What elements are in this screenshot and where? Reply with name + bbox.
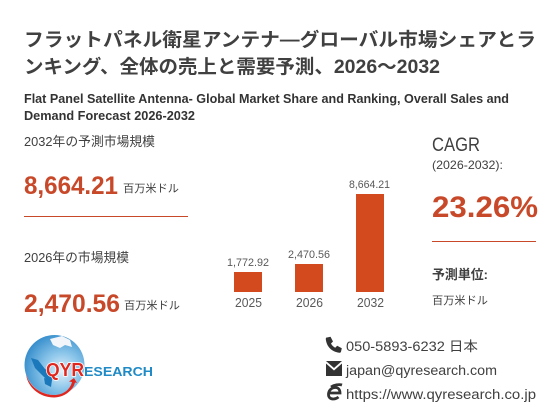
bar: 2026: 2026 <box>296 296 323 310</box>
icon: envelope <box>326 361 342 376</box>
title: Japanese: ンキング、全体の売上と需要予測、2026～2032 <box>24 55 440 78</box>
wordmark: QYR <box>46 360 84 380</box>
bar chart <box>227 179 390 310</box>
bar: 2026: 2,470.56 <box>288 249 330 261</box>
panel: 2032 market size: 百万米ドル <box>123 182 179 195</box>
contact: website: https://www.qyresearch.co.jp <box>346 387 536 402</box>
panel: CAGR: 23.26% <box>432 191 538 224</box>
panel: 2026 market size: 2026年の市場規模 <box>24 250 129 265</box>
panel: forecast unit: 百万米ドル <box>432 294 488 307</box>
logo: QYResearch <box>24 335 153 398</box>
wordmark: ESEARCH <box>84 364 153 379</box>
subtitle: English: Demand Forecast 2026-2032 <box>24 109 195 123</box>
subtitle: English: Flat Panel Satellite Antenna- Global Market Share and Ranking, Overall Sales and <box>24 92 509 106</box>
icon: phone <box>326 337 342 353</box>
panel: forecast unit: 予測単位: <box>432 267 488 282</box>
panel: 2026 market size <box>24 250 180 318</box>
subtitle: English <box>24 92 509 123</box>
panel: 2032 market size: 2032年の予測市場規模 <box>24 134 155 149</box>
panel: 2026 market size: 百万米ドル <box>124 299 180 312</box>
wordmark <box>46 360 153 380</box>
contact: email: japan@qyresearch.com <box>345 363 497 378</box>
title: Japanese <box>24 28 536 78</box>
panel: 2032 market size: 8,664.21 <box>24 172 118 200</box>
bar: 2025 <box>227 257 269 310</box>
bar: 2032: 8,664.21 <box>349 179 390 191</box>
title: Japanese: フラットパネル衛星アンテナ—グローバル市場シェアとラ <box>24 28 536 51</box>
globe <box>24 335 84 398</box>
bar: 2032: 2032 <box>357 296 384 310</box>
panel: 2032 market size <box>24 134 188 217</box>
contact: phone <box>326 337 479 354</box>
bar: 2026 <box>288 249 330 310</box>
icon: internet <box>328 385 342 399</box>
bar: 2025: 1,772.92 <box>227 257 269 269</box>
contact: phone: 050-5893-6232 日本 <box>346 339 479 354</box>
panel: forecast unit <box>432 267 488 307</box>
panel: CAGR: CAGR <box>432 135 480 156</box>
panel: 2026 market size: 2,470.56 <box>24 290 120 318</box>
bar: 2025: 2025 <box>235 296 262 310</box>
panel: CAGR <box>432 135 538 242</box>
panel: CAGR: (2026-2032): <box>432 158 503 172</box>
bar: 2032 <box>349 179 390 310</box>
